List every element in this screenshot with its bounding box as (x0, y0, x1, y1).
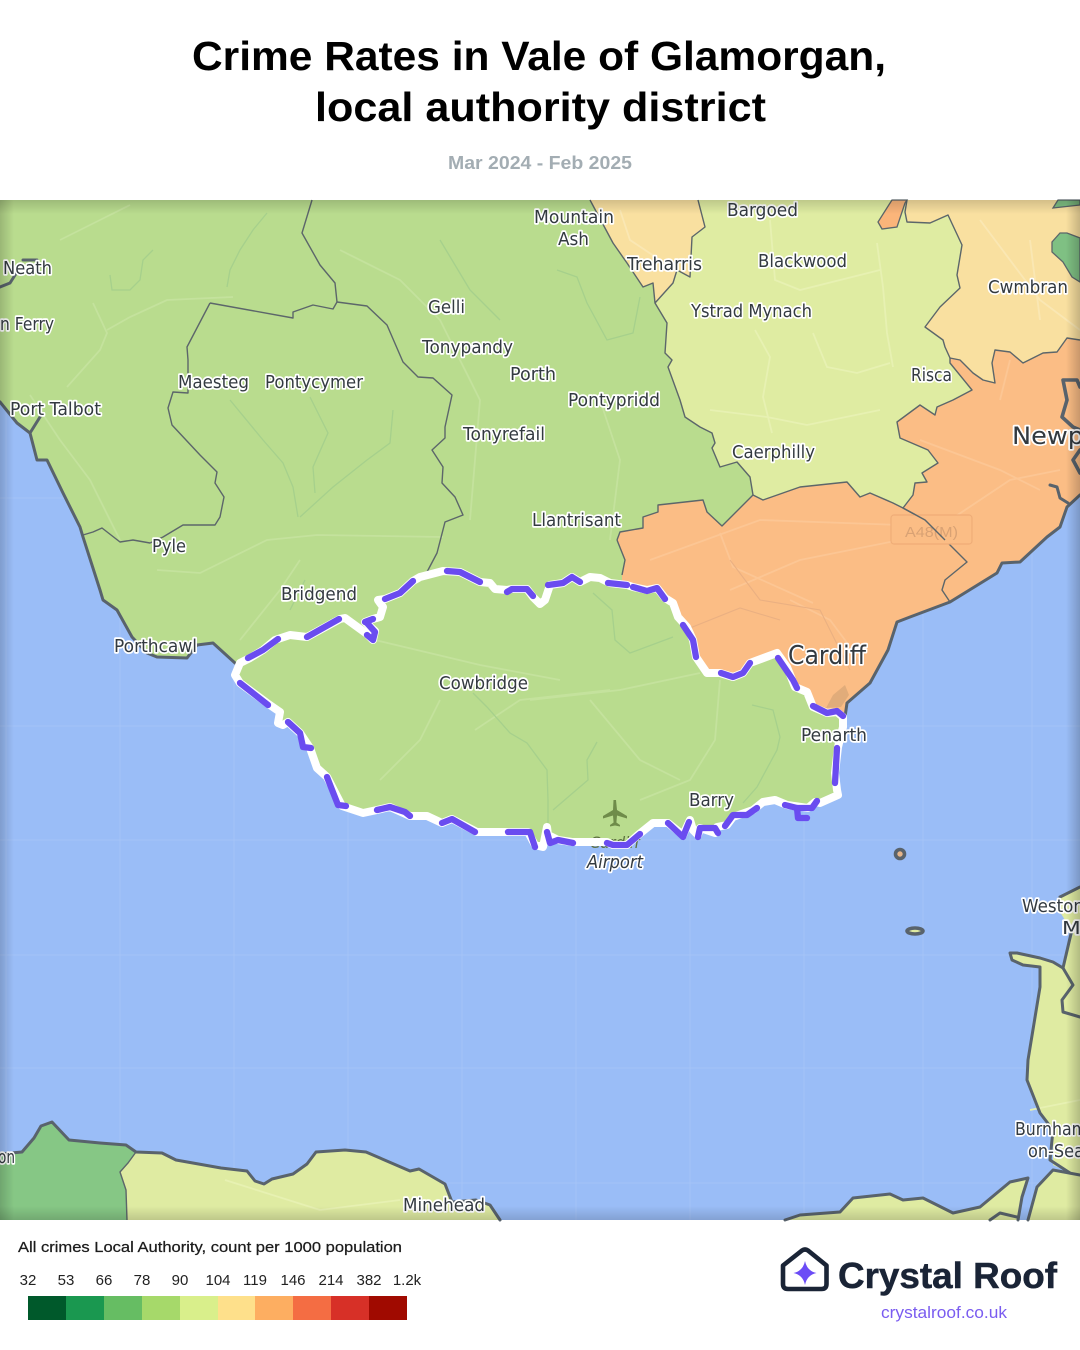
website: crystalroof.co.uk (881, 1304, 1008, 1322)
place labels: Port Talbot (10, 399, 101, 420)
legend values: 53 (58, 1272, 74, 1289)
island: Steep Holm (907, 928, 923, 934)
place labels: Neath (3, 258, 52, 279)
land: Torfaen district (905, 200, 1080, 383)
place labels: Pyle (152, 536, 186, 557)
road sign A48(M): A48(M) (905, 524, 958, 541)
place labels: n Ferry (0, 314, 54, 335)
place labels: Blackwood (758, 251, 847, 272)
place labels: Barry (689, 790, 734, 811)
legend (18, 1239, 422, 1320)
place labels: Ystrad Mynach (690, 301, 812, 322)
place labels (0, 200, 1080, 1216)
legend values: 104 (205, 1272, 231, 1289)
place labels: Porth (510, 364, 556, 385)
legend values: 119 (243, 1272, 267, 1289)
place labels: Cardiff (788, 641, 867, 671)
legend values: 1.2k (393, 1272, 422, 1289)
place labels: Risca (911, 365, 952, 386)
place labels: Minehead (403, 1195, 485, 1216)
place labels: Caerphilly (732, 442, 815, 463)
land: Somerset coast (120, 1150, 500, 1220)
title: Crime Rates in Vale of Glamorgan, (192, 33, 886, 79)
place labels: Maesteg (178, 372, 249, 393)
logo wordmark: Crystal Roof (838, 1255, 1058, 1296)
legend values: 66 (96, 1272, 112, 1289)
legend values (20, 1272, 422, 1289)
icon: airport plane (603, 800, 627, 826)
land: Cardiff and Newport (617, 338, 1080, 717)
Vale of Glamorgan boundary (235, 571, 843, 847)
map (0, 200, 1080, 1220)
place labels: Penarth (801, 725, 867, 746)
land: Merthyr district (590, 200, 705, 303)
legend values: 78 (134, 1272, 150, 1289)
icon: house with star (783, 1250, 826, 1289)
place labels: Tonypandy (421, 337, 513, 358)
land: small orange patch (878, 200, 907, 229)
logo: Crystal Roof (783, 1250, 1058, 1322)
land: bottom left green district (0, 1122, 136, 1220)
map edge shading (0, 200, 1080, 1220)
coastlines (0, 260, 1080, 1220)
place labels: Mountain (534, 207, 614, 228)
place labels: Pontypridd (568, 390, 660, 411)
place labels: Bargoed (727, 200, 798, 221)
legend values: 32 (20, 1272, 36, 1289)
title (192, 33, 886, 130)
legend values: 90 (172, 1272, 188, 1289)
legend values: 146 (280, 1272, 306, 1289)
place labels: Cwmbran (988, 277, 1068, 298)
land: Weston peninsula (1010, 887, 1080, 1175)
place labels: Bridgend (281, 584, 357, 605)
land: Caerphilly district (655, 200, 990, 530)
Cardiff Airport label top: Cardiff (590, 833, 642, 852)
land: Somerset south-east coast (785, 1178, 1028, 1220)
legend values: 382 (356, 1272, 382, 1289)
place labels: Treharris (626, 254, 702, 275)
title: local authority district (315, 84, 766, 130)
place labels: Ash (558, 229, 589, 250)
place labels: Porthcawl (114, 636, 197, 657)
district boundaries (83, 200, 1080, 1220)
Cardiff urban patch (826, 685, 849, 708)
place labels: Airport (586, 852, 644, 873)
island: Flat Holm (896, 850, 904, 858)
place labels: Newp (1012, 422, 1080, 450)
place labels: Cowbridge (439, 673, 528, 694)
place labels: Tonyrefail (462, 424, 545, 445)
legend colour scale (28, 1296, 407, 1320)
land: Monmouthshire patches (1052, 200, 1080, 282)
date range subtitle: Mar 2024 - Feb 2025 (448, 153, 632, 173)
land: green districts (0, 200, 1080, 847)
rivers and roads (30, 205, 1080, 1210)
road sign A48(M) (891, 508, 972, 544)
land: Burnham coast (1028, 1170, 1080, 1220)
sea background (0, 200, 1080, 1220)
place labels: Pontycymer (265, 372, 364, 393)
place labels: Llantrisant (532, 510, 621, 531)
legend title: All crimes Local Authority, count per 1000 population (18, 1239, 402, 1256)
place labels: Gelli (428, 297, 465, 318)
legend values: 214 (318, 1272, 344, 1289)
